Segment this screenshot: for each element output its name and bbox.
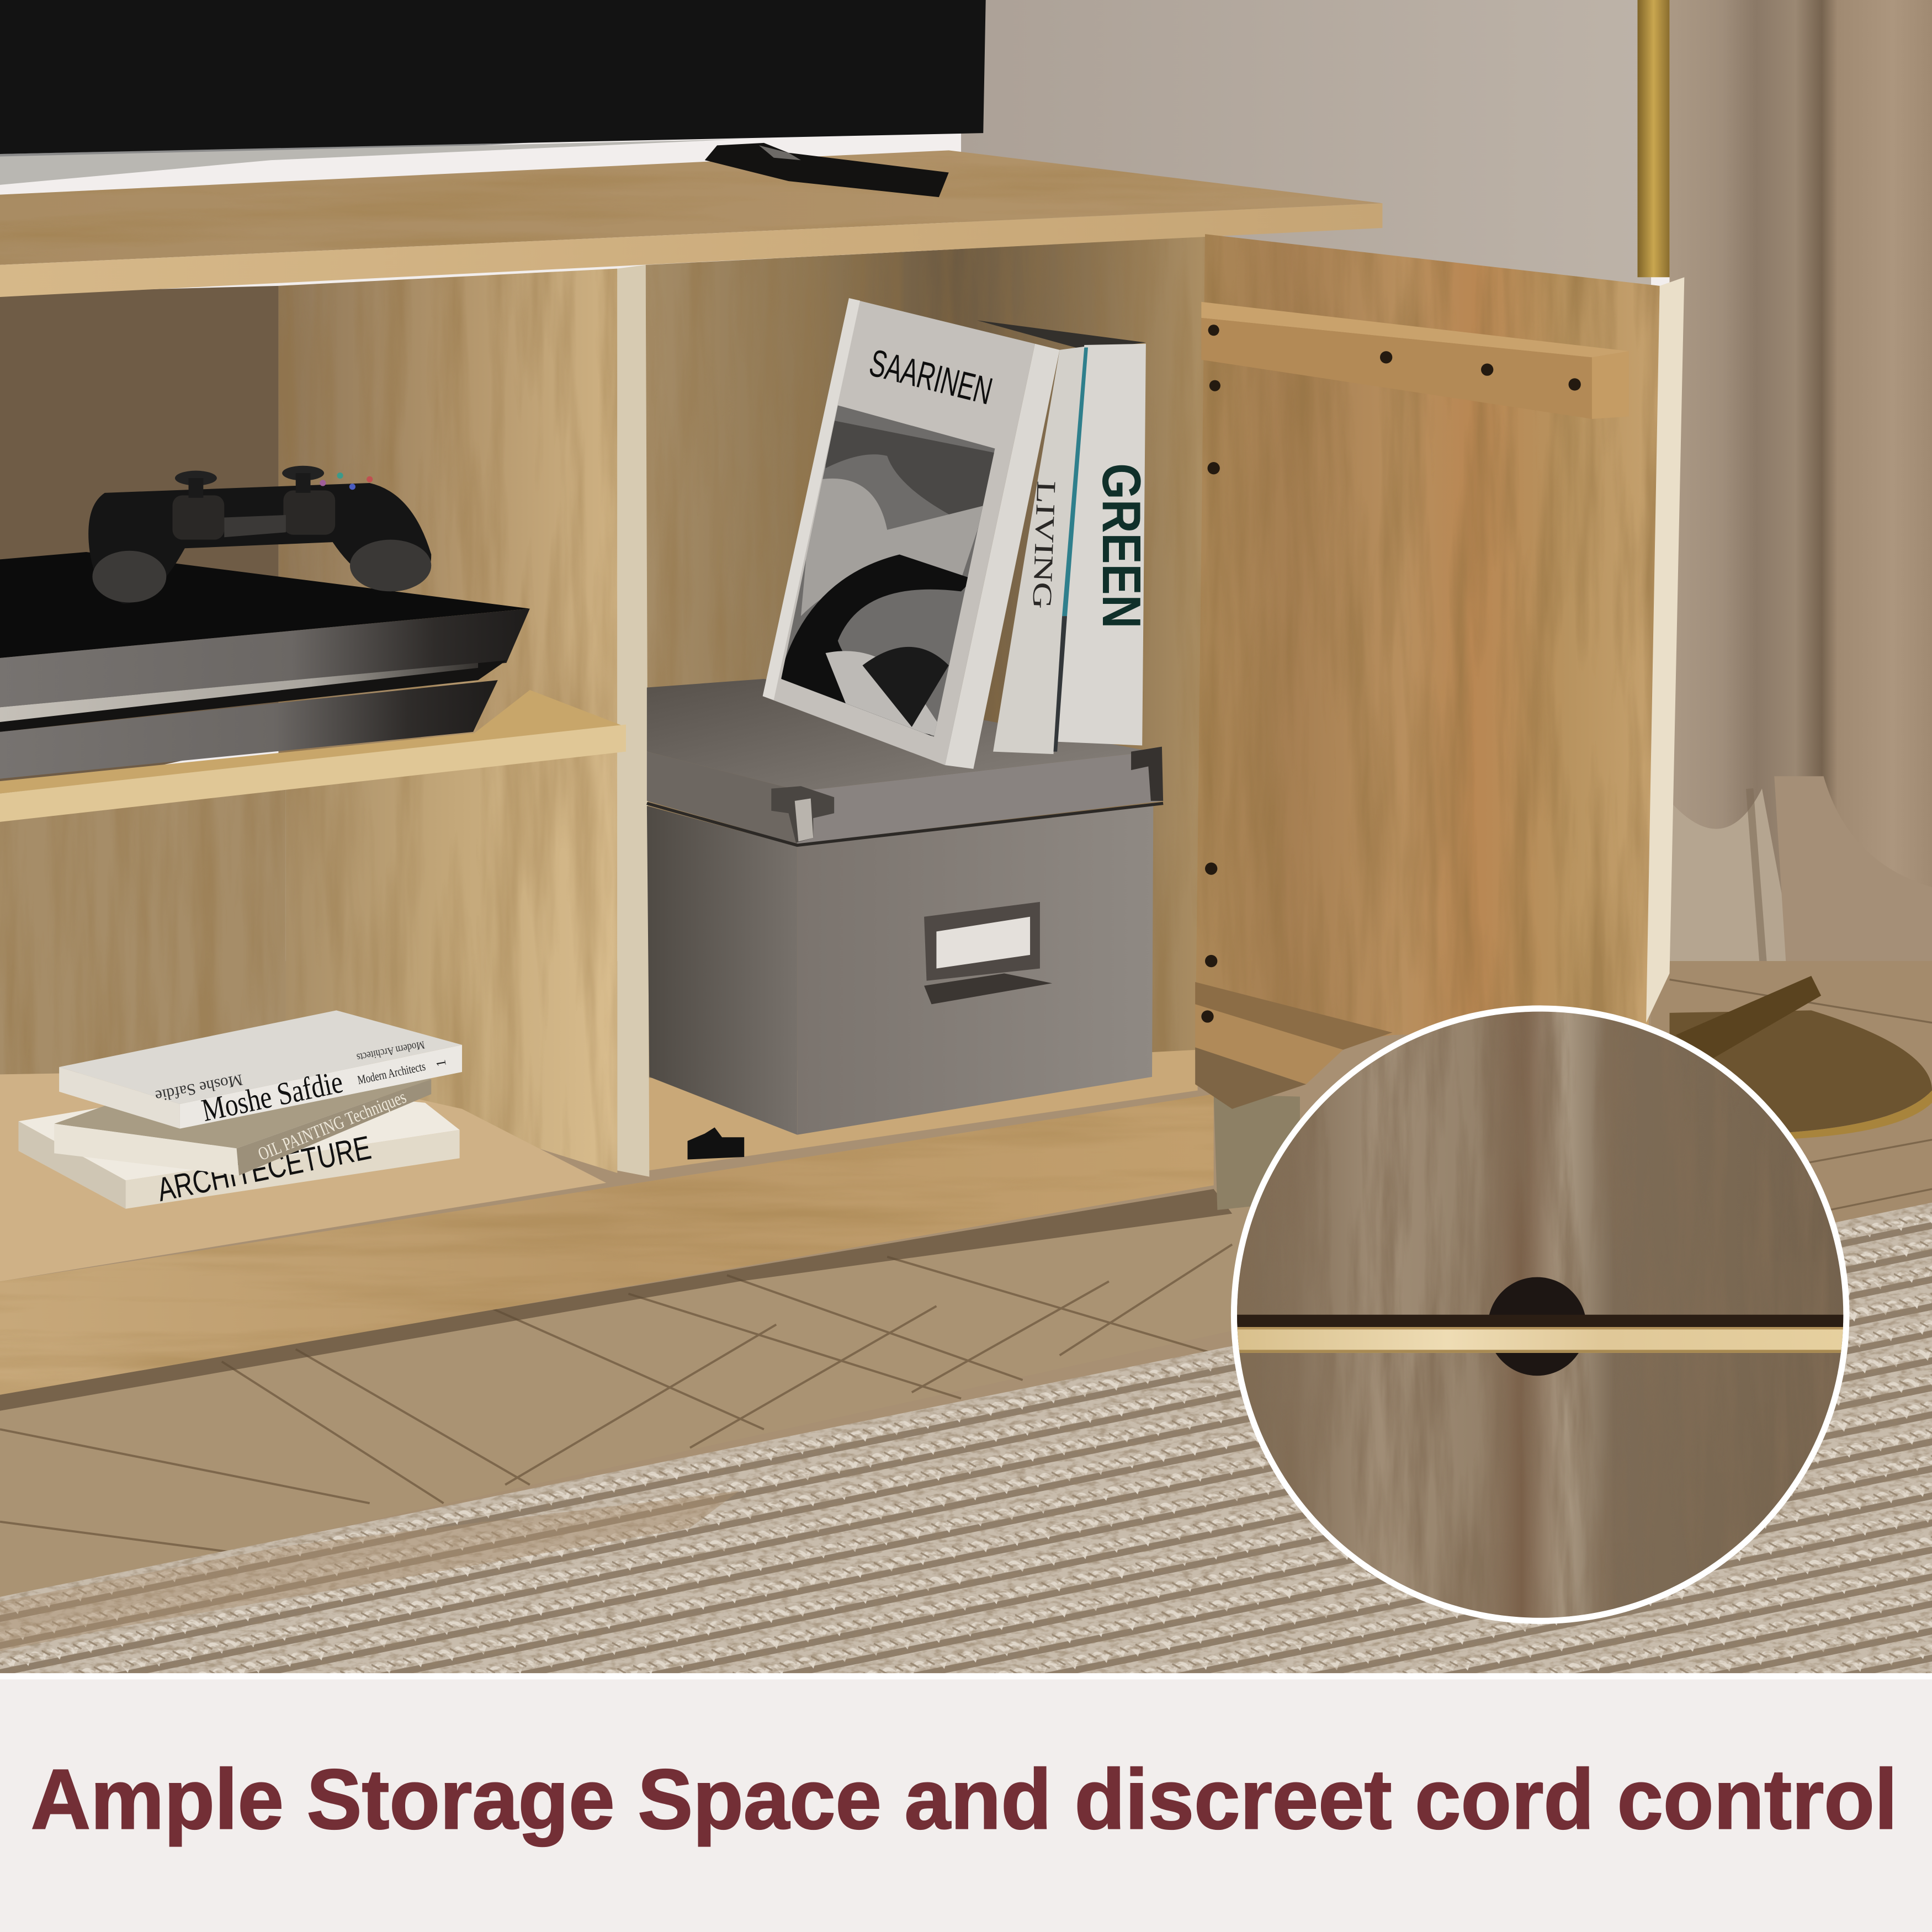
bottom book [18, 1084, 460, 1209]
box left side [647, 806, 797, 1135]
stacked books on lower shelf [18, 1010, 462, 1209]
lower left side panel [286, 752, 617, 1173]
lower left shelf floor [0, 1070, 606, 1281]
cord hole [1488, 1277, 1586, 1376]
living book: LIVING [1027, 480, 1061, 609]
door inner face [1195, 234, 1660, 1060]
bottom book: ARCHITECETURE [154, 1128, 374, 1208]
middle book [54, 1060, 431, 1175]
storage box [647, 679, 1163, 1135]
magnified cord hole detail circle [1231, 1004, 1849, 1626]
door edge [1646, 277, 1684, 1023]
door hardware holes [1201, 325, 1581, 1023]
saarinen book [763, 298, 1060, 769]
upper left compartment back [0, 286, 278, 801]
lid corner brackets [771, 747, 1163, 843]
game console [0, 552, 530, 779]
lens shelf edge [1232, 1327, 1848, 1353]
right compartment back [646, 237, 1205, 1099]
woven rug [0, 1195, 1932, 1676]
shadow under cabinet [0, 1189, 1232, 1411]
right compartment floor [648, 1050, 1198, 1171]
lens shelf shadow [1232, 1315, 1848, 1328]
door lower batten [1195, 982, 1392, 1109]
cable clip [688, 1127, 744, 1159]
saarinen book: SAARINEN [866, 341, 996, 413]
cabinet top surface [0, 150, 1382, 265]
upper left side panel [278, 269, 617, 764]
centre divider edge [617, 265, 649, 1177]
middle book: OIL PAINTING Techniques [255, 1087, 409, 1165]
plinth front [0, 1094, 1214, 1395]
television [0, 0, 986, 197]
gold floor lamp pole [1638, 0, 1670, 277]
curtain [1670, 0, 1932, 998]
green book: GREEN [1091, 463, 1152, 628]
caption title: Ample Storage Space and discreet cord control [31, 1751, 1898, 1846]
box front side [797, 806, 1153, 1135]
cabinet top front edge [0, 203, 1382, 297]
top book: Modern Architects [356, 1059, 427, 1087]
white divider strip [0, 1673, 1932, 1679]
top book: Moshe Safdie [199, 1064, 346, 1128]
gold lamp base [1670, 976, 1932, 1140]
tv stand foot [705, 143, 949, 197]
wooden floor [0, 961, 1932, 1651]
tv stand cabinet [0, 150, 1382, 1395]
book cover photo [781, 405, 995, 737]
lens wood panel [1232, 1004, 1848, 1626]
top book: 1 [433, 1059, 449, 1068]
middle shelf [0, 690, 626, 822]
caption band [0, 1679, 1932, 1932]
living book [993, 346, 1088, 754]
top book: Moshe Safdie [153, 1071, 244, 1105]
top book [59, 1010, 462, 1129]
box lid top [647, 679, 1152, 791]
cabinet leg [1214, 1094, 1300, 1210]
game controller [88, 466, 431, 604]
lower left compartment back [0, 789, 286, 1074]
green book [977, 320, 1152, 745]
background wall [961, 0, 1651, 296]
open door [1195, 234, 1684, 1109]
top book: Modern Architects [355, 1038, 426, 1064]
box lid sides [647, 752, 801, 844]
door upper batten [1201, 302, 1629, 419]
label holder [924, 902, 1052, 1004]
books upright [763, 298, 1152, 769]
